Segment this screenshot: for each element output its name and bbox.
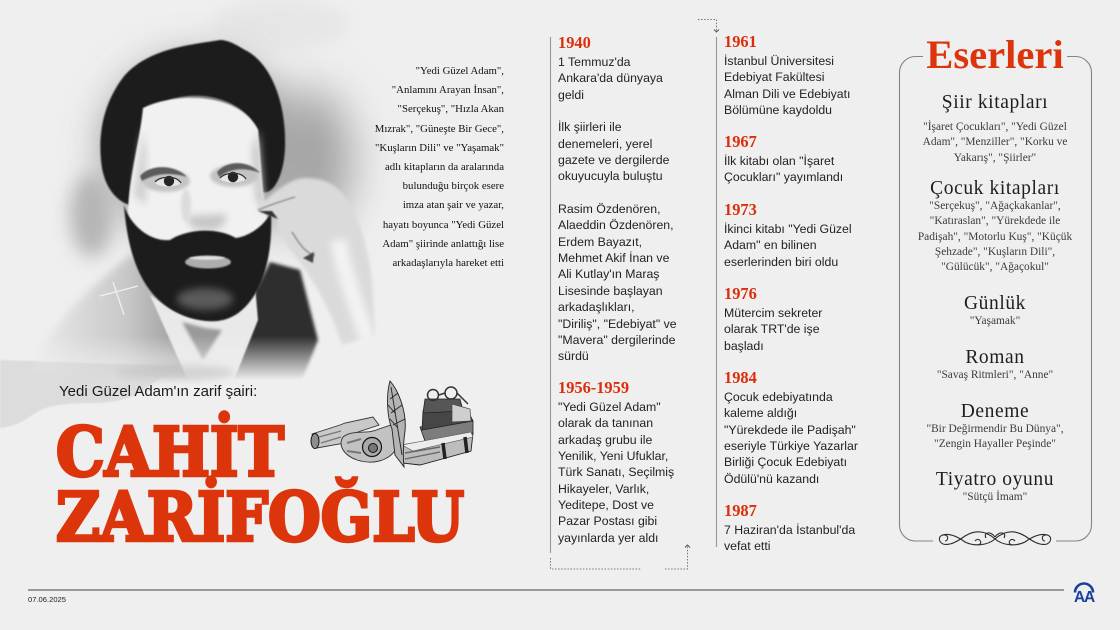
timeline entry 1984: kaleme aldığı [724, 406, 797, 420]
closed scroll [312, 417, 379, 448]
hand [256, 178, 375, 345]
timeline entry 1987 [724, 501, 856, 553]
timeline entry 1940: "Mavera" dergilerinde [558, 333, 675, 347]
timeline entry 1967: Çocukları" yayımlandı [724, 170, 843, 184]
works list: Şiir kitapları: "İşaret Çocukları", "Yedi Güzel [923, 121, 1067, 133]
works list: Deneme [926, 423, 1064, 450]
footer rule [28, 589, 1064, 591]
works list: Çocuk kitapları: Şehzade", "Kuşların Dili", [935, 246, 1055, 258]
timeline entry 1984: "Yürekdede ile Padişah" [724, 423, 856, 437]
eyeglasses [428, 387, 468, 404]
ornament [939, 532, 1051, 545]
timeline entry 1956-1959: olarak da tanınan [558, 416, 653, 430]
works list: Günlük: "Yaşamak" [970, 315, 1020, 327]
timeline entry 1956-1959: Pazar Postası gibi [558, 514, 657, 528]
timeline entry 1976: 1976 [724, 284, 757, 303]
quote text block: bulunduğu birçok esere [403, 180, 504, 192]
quote text block: "Serçekuş", "Hızla Akan [398, 103, 504, 115]
timeline entry 1956-1959: Türk Sanatı, Seçilmiş [558, 465, 674, 479]
timeline entry 1984: Ödülü'nü kazandı [724, 472, 819, 486]
timeline entry 1973 [724, 200, 852, 269]
timeline entry 1984: Çocuk edebiyatında [724, 390, 833, 404]
beard and moustache [124, 205, 271, 321]
works list: Çocuk kitapları [918, 200, 1072, 273]
timeline entry 1961: 1961 [724, 32, 757, 51]
shirt and vest [50, 252, 184, 374]
eyes [155, 178, 181, 186]
quote text block: adlı kitapların da aralarında [385, 161, 504, 173]
timeline entry 1967: İlk kitabı olan "İşaret [724, 154, 834, 168]
arrow: dotted connector top [698, 20, 716, 31]
works list: Çocuk kitapları: "Gülücük", "Ağaçokul" [941, 261, 1049, 273]
works: Roman: Roman [965, 347, 1025, 368]
timeline entry 1940: 1 Temmuz'da [558, 55, 631, 69]
feather [388, 381, 405, 467]
works: Çocuk kitapları: Çocuk kitapları [930, 178, 1060, 199]
timeline entry 1956-1959: Yenilik, Yeni Ufuklar, [558, 449, 668, 463]
works list: Şiir kitapları: Yakarış", "Şiirler" [954, 152, 1036, 164]
timeline entry 1961: Alman Dili ve Edebiyatı [724, 87, 850, 101]
timeline entry 1940: Erdem Bayazıt, [558, 235, 642, 249]
works: Şiir kitapları: Şiir kitapları [942, 92, 1048, 113]
timeline entry 1940 [558, 33, 677, 363]
works list: Deneme: "Bir Değirmendir Bu Dünya", [926, 423, 1064, 435]
timeline entry 1940: gazete ve dergilerde [558, 153, 669, 167]
title: name: ZARİFOĞLU [56, 476, 464, 556]
timeline entry 1984: eseriyle Türkiye Yazarlar [724, 439, 858, 453]
timeline entry 1987: vefat etti [724, 539, 770, 553]
arrow: dotted connector bottom [550, 545, 688, 569]
timeline entry 1984: Birliği Çocuk Edebiyatı [724, 455, 847, 469]
logo: AA [1074, 582, 1095, 604]
illustration: books, scroll and feather [310, 380, 474, 468]
timeline entry 1961: Edebiyat Fakültesi [724, 70, 824, 84]
timeline entry 1987: 7 Haziran'da İstanbul'da [724, 523, 855, 537]
quote text block: "Kuşların Dili" ve "Yaşamak" [375, 142, 504, 154]
quote text block: hayatı boyunca "Yedi Güzel [383, 219, 504, 231]
timeline entry 1940: arkadaşlıkları, [558, 300, 635, 314]
quote text block: "Yedi Güzel Adam", [416, 65, 504, 77]
timeline entry 1984: 1984 [724, 368, 757, 387]
timeline entry 1973: İkinci kitabı "Yedi Güzel [724, 222, 852, 236]
timeline entry 1940: Ali Kutlay'ın Maraş [558, 267, 659, 281]
timeline entry 1961: İstanbul Üniversitesi [724, 54, 834, 68]
timeline entry 1973: 1973 [724, 200, 757, 219]
timeline entry 1976: başladı [724, 339, 764, 353]
timeline entry 1956-1959: arkadaş grubu ile [558, 433, 652, 447]
quote text block: imza atan şair ve yazar, [403, 199, 504, 211]
works list: Şiir kitapları [922, 120, 1068, 164]
timeline entry 1956-1959 [558, 378, 674, 545]
timeline entry 1984 [724, 368, 858, 486]
timeline entry 1961 [724, 32, 850, 117]
timeline entry 1940: denemeleri, yerel [558, 137, 652, 151]
face [127, 96, 268, 240]
works: Günlük: Günlük [964, 293, 1026, 314]
timeline entry 1956-1959: "Yedi Güzel Adam" [558, 400, 661, 414]
timeline entry 1976: Mütercim sekreter [724, 306, 822, 320]
big book [402, 433, 473, 465]
timeline entry 1940: okuyucuyla buluştu [558, 169, 663, 183]
timeline entry 1956-1959: yayınlarda yer aldı [558, 531, 658, 545]
stacked books [420, 421, 473, 441]
timeline entry 1940: "Diriliş", "Edebiyat" ve [558, 316, 677, 330]
quote text block [375, 65, 504, 269]
quote text block: Adam" şiirinde anlattığı lise [382, 238, 504, 250]
works list: Şiir kitapları: Adam", "Menziller", "Korku ve [923, 136, 1067, 148]
timeline entry 1961: Bölümüne kaydoldu [724, 103, 832, 117]
timeline entry 1956-1959: Yeditepe, Dost ve [558, 498, 654, 512]
timeline entry 1987: 1987 [724, 501, 757, 520]
quote text block: Mızrak", "Güneşte Bir Gece", [375, 123, 504, 135]
works: Deneme: Deneme [961, 401, 1029, 422]
timeline entry 1940: Alaeddin Özdenören, [558, 218, 674, 232]
timeline entry 1956-1959: 1956-1959 [558, 378, 629, 397]
works list: Deneme: "Zengin Hayaller Peşinde" [934, 438, 1056, 450]
timeline entry 1940: İlk şiirleri ile [558, 120, 622, 134]
hair [100, 40, 285, 206]
portrait of Cahit Zarifoğlu [50, 34, 378, 378]
subtitle: Yedi Güzel Adam'ın zarif şairi: [59, 383, 257, 400]
timeline entry 1940: Rasim Özdenören, [558, 202, 661, 216]
timeline entry 1976 [724, 284, 822, 353]
nose [186, 214, 226, 230]
quote text block: "Anlamını Arayan İnsan", [392, 84, 504, 96]
title: name [56, 410, 464, 556]
works: Tiyatro oyunu: Tiyatro oyunu [936, 469, 1054, 490]
brows and eye sockets [142, 170, 190, 192]
works list: Çocuk kitapları: "Katıraslan", "Yürekdede ile [930, 215, 1060, 227]
works list: Tiyatro oyunu: "Sütçü İmam" [963, 491, 1027, 503]
timeline entry 1940: sürdü [558, 349, 589, 363]
heading: Eserleri: Eserleri [926, 32, 1064, 77]
timeline entry 1940: Mehmet Akif İnan ve [558, 251, 669, 265]
timeline entry 1940: Lisesinde başlayan [558, 284, 663, 298]
timeline entry 1940: geldi [558, 88, 584, 102]
title: name: CAHİT [56, 412, 284, 492]
quote text block: arkadaşlarıyla hareket etti [392, 257, 504, 269]
works list: Çocuk kitapları: "Serçekuş", "Ağaçkakanlar", [929, 200, 1061, 212]
works list: Roman: "Savaş Ritmleri", "Anne" [937, 369, 1053, 381]
open scroll [341, 425, 398, 462]
timeline entry 1976: olarak TRT'de işe [724, 322, 820, 336]
timeline entry 1967 [724, 132, 843, 184]
timeline entry 1973: Adam" en bilinen [724, 238, 817, 252]
works list: Çocuk kitapları: Padişah", "Motorlu Kuş", "Küçük [918, 231, 1072, 243]
timeline entry 1940: Ankara'da dünyaya [558, 71, 663, 85]
date: 07.06.2025 [28, 595, 66, 604]
timeline entry 1973: eserlerinden biri oldu [724, 255, 838, 269]
timeline entry 1940: 1940 [558, 33, 591, 52]
timeline entry 1956-1959: Hikayeler, Varlık, [558, 482, 649, 496]
timeline entry 1967: 1967 [724, 132, 757, 151]
